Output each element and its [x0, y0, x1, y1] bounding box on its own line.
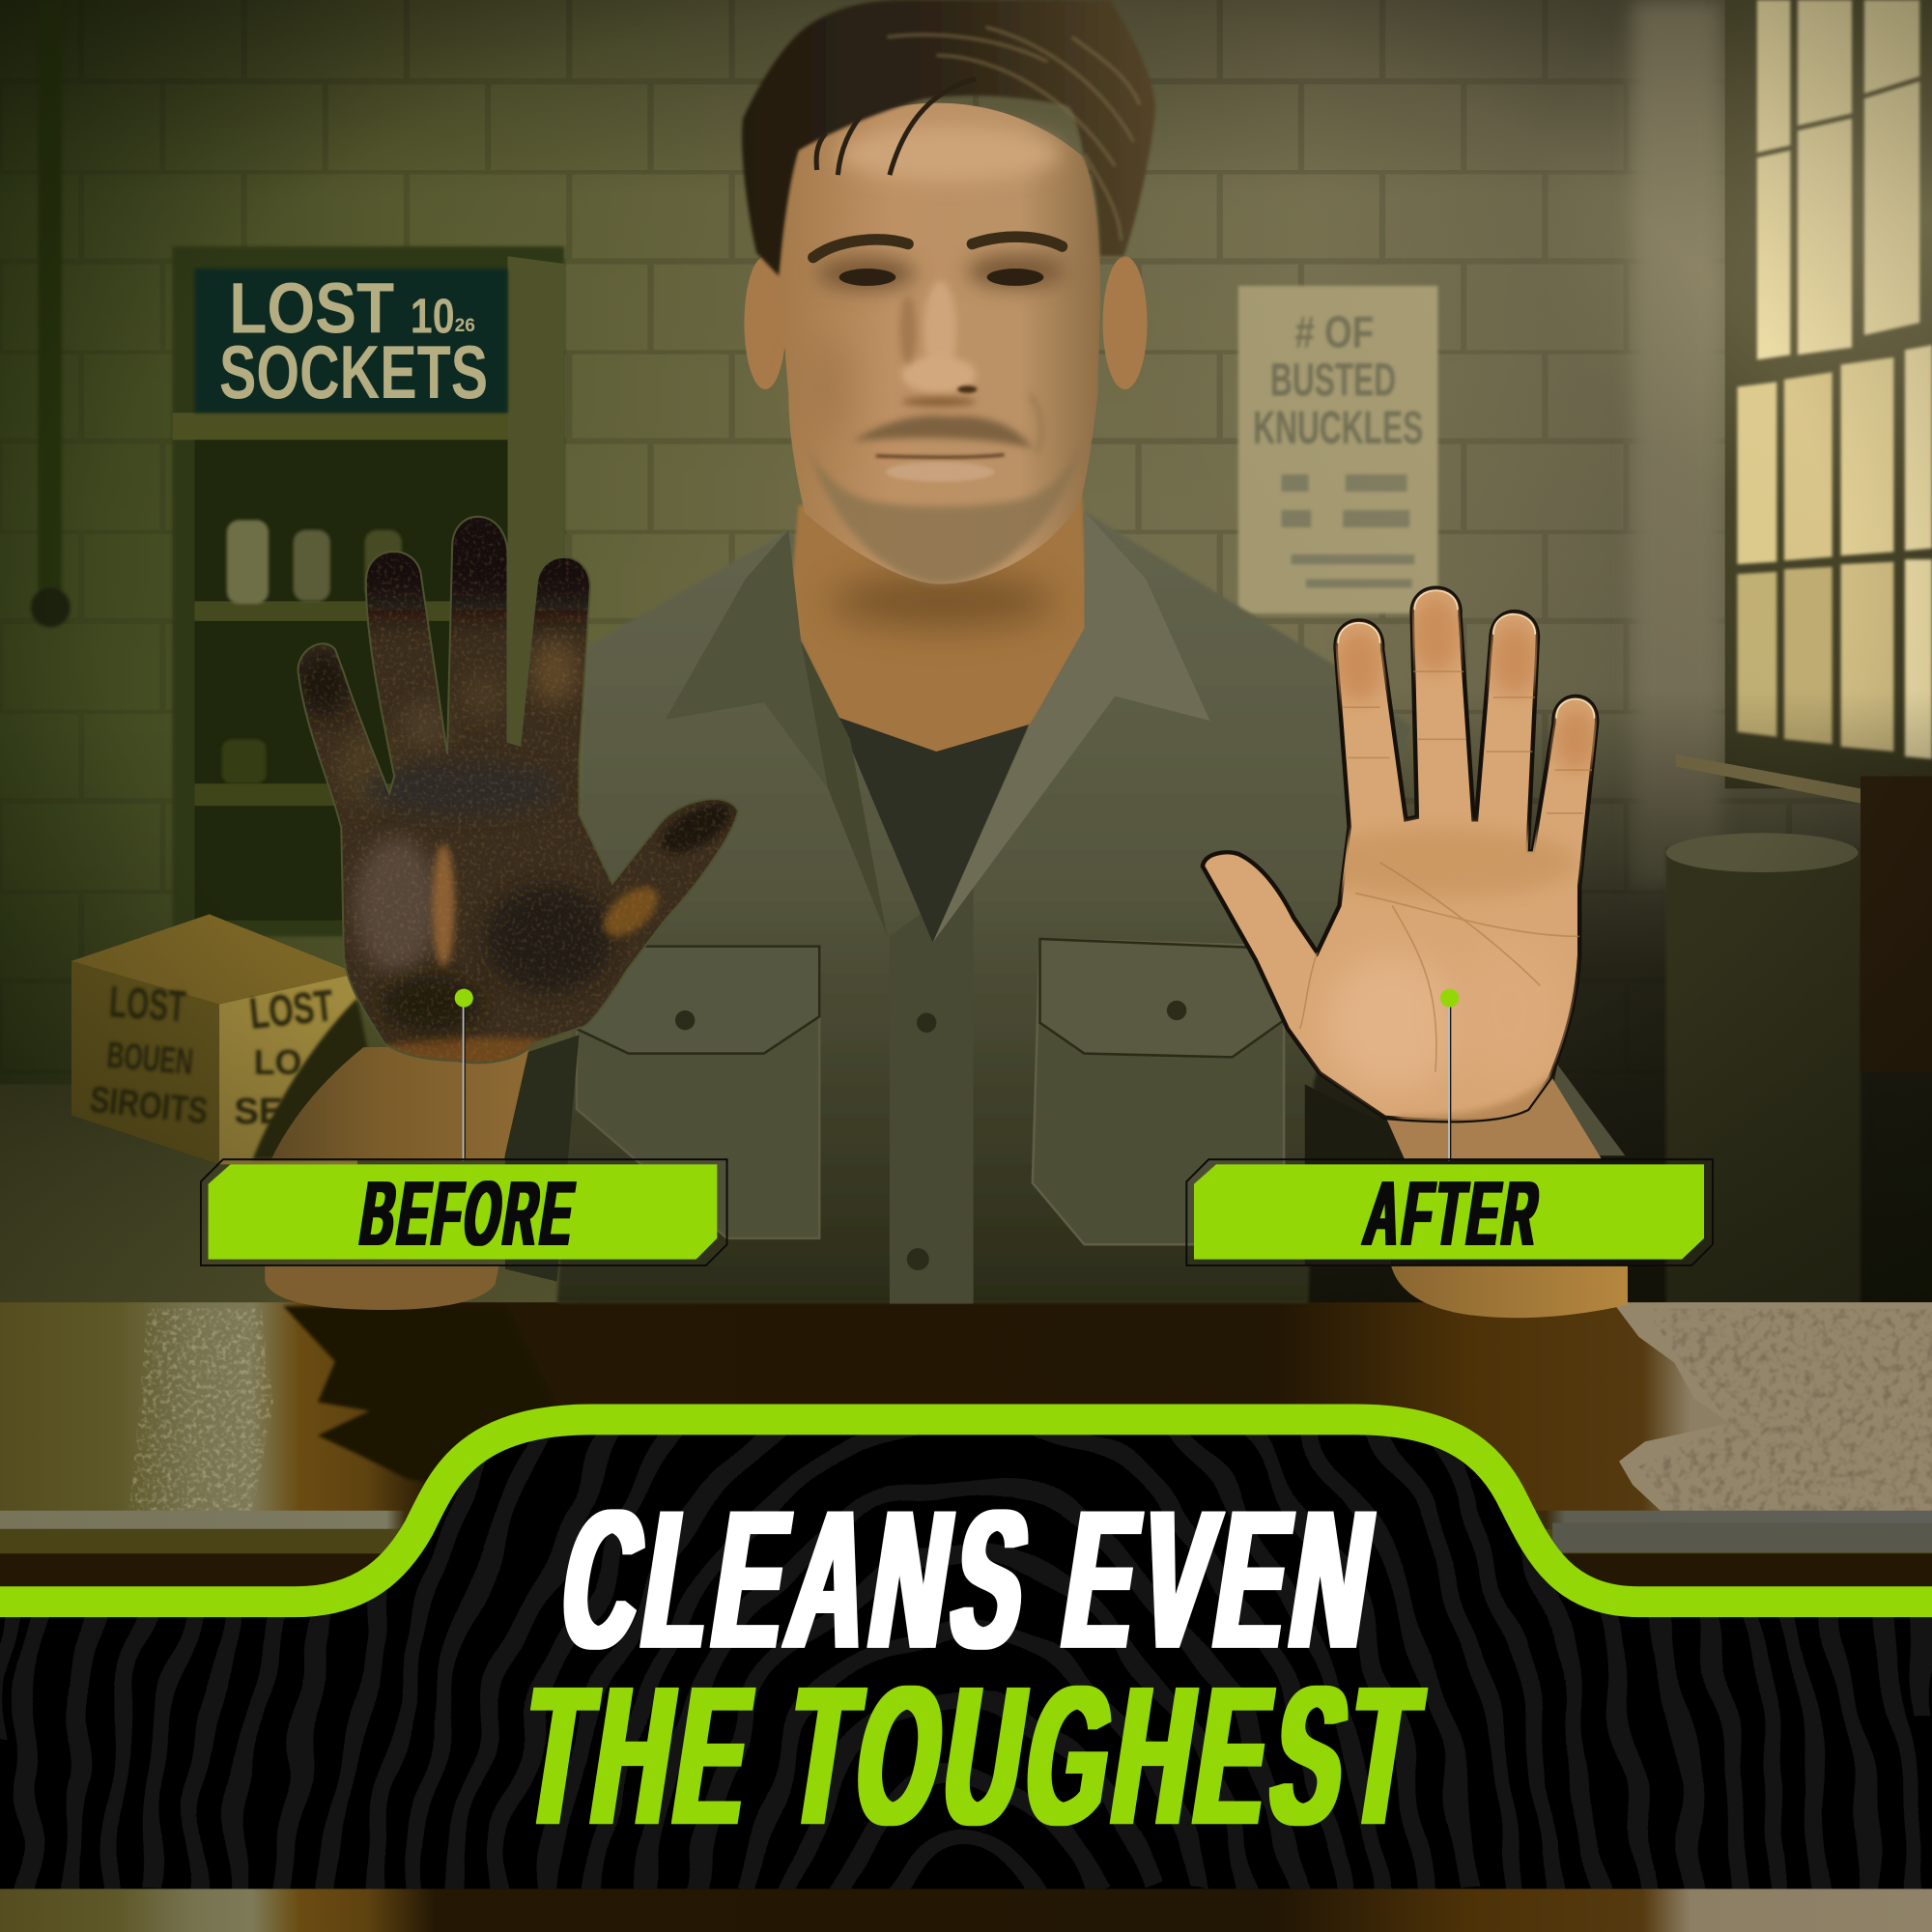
before marker dot	[455, 989, 473, 1161]
wall pipe	[31, 0, 71, 627]
poster: # OF	[1295, 307, 1374, 357]
shirt	[557, 511, 1410, 1303]
window	[1725, 0, 1932, 788]
clean hand	[1203, 588, 1598, 1123]
undershirt	[838, 717, 1029, 943]
green curved band	[0, 1419, 1932, 1602]
cardboard box: BOUEN	[105, 1035, 195, 1083]
after marker dot	[1440, 989, 1459, 1161]
shelf jars	[222, 520, 402, 783]
fingerprint pattern	[0, 1435, 1932, 1889]
cardboard box: LOST	[247, 980, 336, 1038]
dirty hand	[298, 516, 739, 1065]
cardboard box: SIROITS	[88, 1079, 210, 1132]
after label: AFTER	[1358, 1163, 1548, 1264]
shelf with sign	[173, 246, 564, 936]
poster: BUSTED	[1270, 354, 1396, 406]
man	[505, 0, 1410, 1303]
after label	[1186, 1159, 1713, 1265]
hair	[742, 0, 1155, 276]
cardboard box: LOST	[108, 976, 187, 1032]
sign text: 26	[455, 316, 475, 336]
collars	[666, 511, 1210, 943]
dark lower right of room	[1306, 690, 1932, 1306]
before label: BEFORE	[355, 1163, 584, 1264]
facial shading	[806, 127, 1065, 453]
shadow under chin	[832, 574, 1054, 629]
moustache	[853, 415, 1033, 448]
poster	[1238, 286, 1438, 613]
window wall column	[1633, 0, 1721, 887]
vignette	[0, 0, 1932, 1306]
sign text: LOST	[229, 268, 394, 348]
atmospheric light from window	[863, 0, 1932, 863]
bottom strip of counter	[0, 1889, 1932, 1932]
sign text	[219, 268, 488, 414]
ears	[744, 256, 1148, 389]
cardboard box	[71, 914, 357, 1164]
poster: KNUCKLES	[1253, 402, 1423, 454]
face	[779, 103, 1100, 584]
photo background: workshop wall	[0, 0, 1932, 1306]
neck	[788, 493, 1091, 754]
right wrist and sleeve	[1385, 1065, 1628, 1318]
title panel	[0, 1405, 1932, 1889]
forelock	[816, 79, 976, 175]
mouth	[876, 385, 1005, 482]
cardboard box: LO	[254, 1043, 301, 1082]
before callout	[201, 989, 727, 1265]
sign text: SOCKETS	[219, 331, 488, 414]
right sleeve shadow	[1305, 1084, 1391, 1265]
stubble	[807, 438, 1084, 584]
hair highlights	[887, 27, 1140, 241]
after callout	[1186, 989, 1713, 1265]
before label	[201, 1159, 727, 1265]
headline	[510, 1469, 1439, 1866]
cardboard box: SE	[234, 1091, 283, 1132]
eyes and brows	[813, 237, 1062, 286]
left sleeve shadow	[505, 1035, 579, 1282]
counter with oil spill	[0, 1302, 1932, 1591]
sill and barrel	[1665, 754, 1932, 1306]
sign text: 10	[411, 288, 455, 343]
left forearm	[252, 998, 529, 1310]
